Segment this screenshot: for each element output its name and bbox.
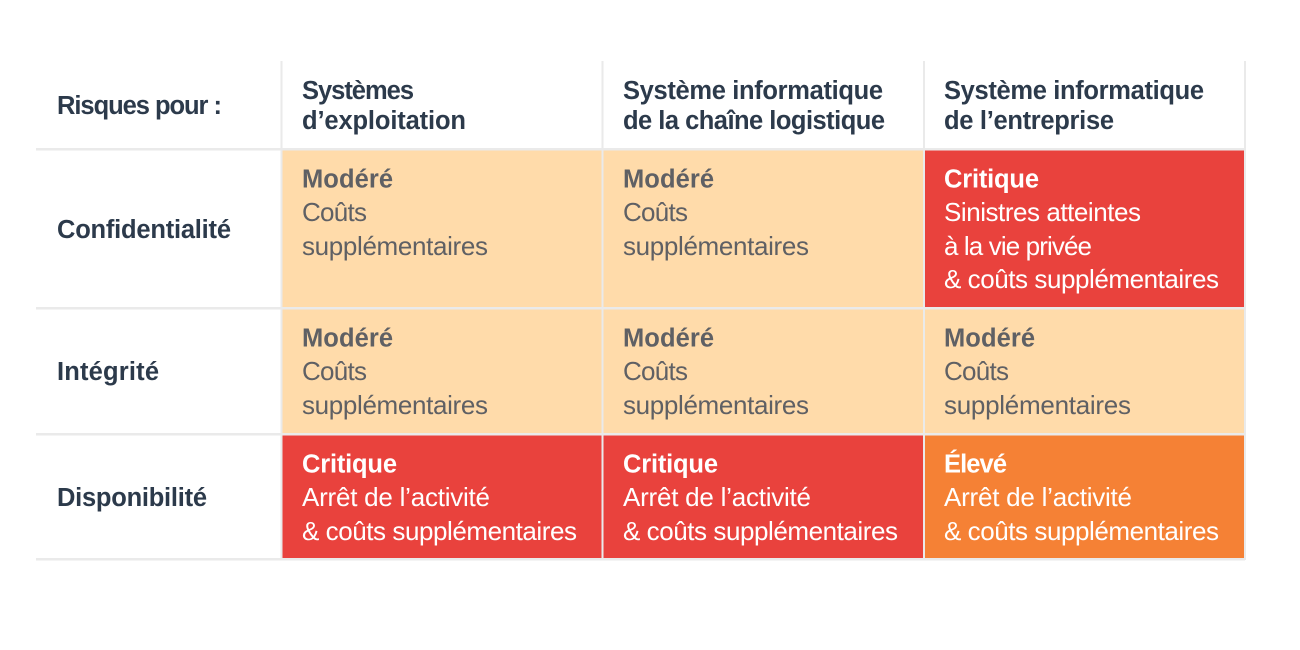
cell: confidentiality / enterprise [925, 150, 1244, 307]
cell: confidentiality / operational [282, 150, 602, 307]
cell: availability / supply chain: & coûts supplémentaires [623, 516, 898, 546]
cell: integrity / operational: supplémentaires [302, 390, 488, 420]
header: enterprise IT [944, 77, 1204, 135]
cell: confidentiality / enterprise: à la vie privée [944, 231, 1092, 261]
cell: availability / operational: Arrêt de l’activité [302, 482, 490, 512]
cell: confidentiality / supply chain: Coûts [623, 197, 688, 227]
cell: availability / operational: & coûts supplémentaires [302, 516, 577, 546]
cell: confidentiality / operational: Coûts [302, 197, 367, 227]
header: operational systems [302, 77, 466, 135]
cell: availability / operational: Critique [302, 450, 397, 478]
cell: integrity / operational: Coûts [302, 356, 367, 386]
cell: availability / enterprise [925, 436, 1244, 558]
row label: confidentiality: Confidentialité [57, 216, 231, 244]
cell: confidentiality / supply chain: supplémentaires [623, 231, 809, 261]
cell: availability / supply chain [604, 436, 923, 558]
cell: integrity / supply chain [604, 310, 923, 433]
header: supply chain IT: de la chaîne logistique [623, 107, 885, 135]
cell: availability / operational [282, 436, 602, 558]
cell: confidentiality / enterprise: Critique [944, 166, 1039, 194]
cell: availability / enterprise: Élevé [944, 450, 1007, 478]
cell: integrity / enterprise: Coûts [944, 356, 1009, 386]
header: row label: Risques pour : [57, 92, 222, 120]
cell: integrity / supply chain: Coûts [623, 356, 688, 386]
header: supply chain IT [623, 77, 885, 135]
cell: availability / enterprise: & coûts supplémentaires [944, 516, 1219, 546]
cell: availability / enterprise: Arrêt de l’activité [944, 482, 1132, 512]
table grid lines [36, 61, 1246, 560]
cell: integrity / operational: Modéré [302, 324, 393, 352]
row label: availability: Disponibilité [57, 484, 207, 512]
cell: confidentiality / supply chain: Modéré [623, 166, 714, 194]
header: operational systems: Systèmes [302, 77, 414, 105]
cell: availability / supply chain: Critique [623, 450, 718, 478]
cell: integrity / enterprise: supplémentaires [944, 390, 1131, 420]
row label: integrity: Intégrité [57, 358, 159, 386]
cell: integrity / operational [282, 310, 602, 433]
header: supply chain IT: Système informatique [623, 77, 883, 105]
cell: integrity / enterprise: Modéré [944, 324, 1035, 352]
header: enterprise IT: de l’entreprise [944, 107, 1114, 135]
cell: confidentiality / enterprise: & coûts supplémentaires [944, 264, 1219, 294]
cell: confidentiality / operational: supplémentaires [302, 231, 488, 261]
cell: confidentiality / enterprise: Sinistres atteintes [944, 197, 1141, 227]
header: operational systems: d’exploitation [302, 107, 466, 135]
header: enterprise IT: Système informatique [944, 77, 1204, 105]
cell: integrity / supply chain: supplémentaires [623, 390, 809, 420]
cell: confidentiality / supply chain [604, 150, 923, 307]
cell: confidentiality / operational: Modéré [302, 166, 393, 194]
cell: integrity / enterprise [925, 310, 1244, 433]
cell: integrity / supply chain: Modéré [623, 324, 714, 352]
cell: availability / supply chain: Arrêt de l’activité [623, 482, 811, 512]
